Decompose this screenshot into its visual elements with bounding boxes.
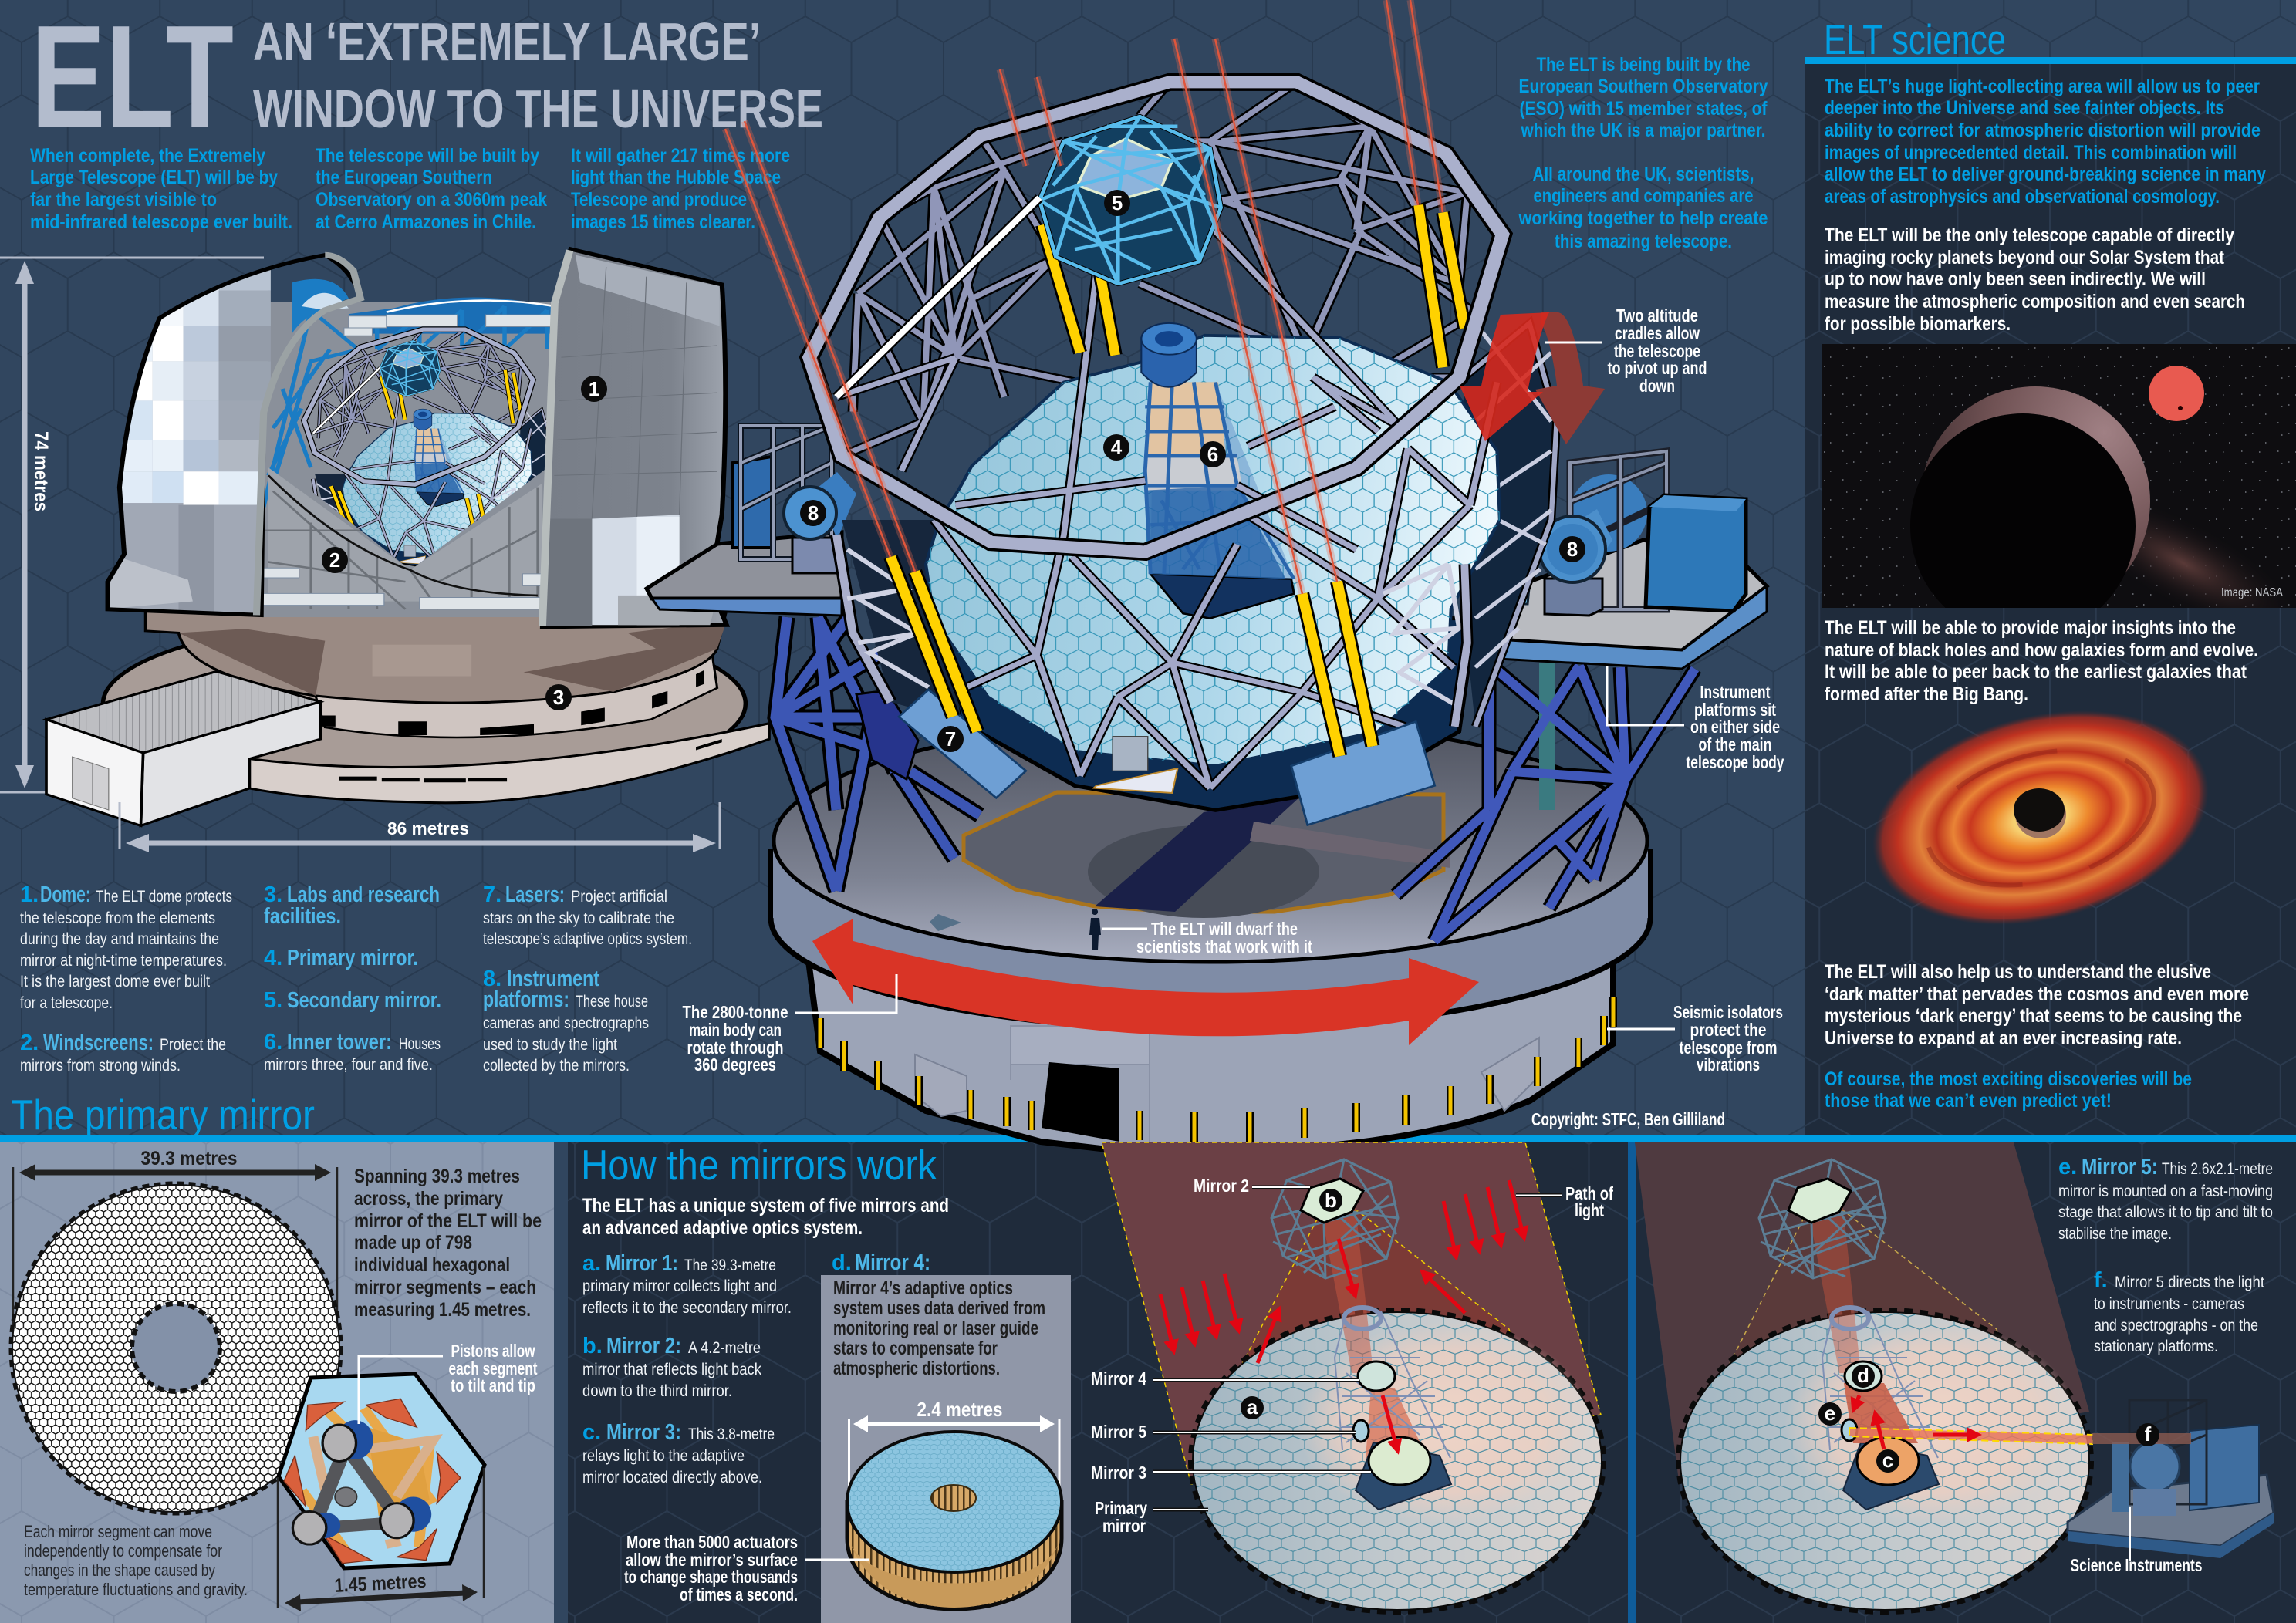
text: mirror 2: down to the third mirror.: [582, 1382, 732, 1400]
text: mirror 2: mirror that reflects light back: [582, 1361, 761, 1378]
text: mirror 5: Mirror 5:: [2082, 1155, 2158, 1179]
text: intro column 3: [571, 145, 790, 233]
panel: mirror 4: system uses data derived from: [833, 1297, 1045, 1319]
text: intro column 2: The telescope will be built by: [316, 145, 539, 167]
text: segment independence note: Each mirror segment can move: [24, 1522, 212, 1541]
text: mirror 3: [582, 1420, 775, 1486]
dimension arrow: 1.45 metres: [278, 1468, 484, 1611]
panel: mirror 4: [821, 1275, 1071, 1623]
text: intro column 2: the European Southern: [316, 167, 492, 188]
legend column 2: mirrors three, four and five.: [264, 1056, 433, 1074]
text: primary mirror description: measuring 1.45 metres.: [354, 1299, 531, 1321]
callout: pistons: [359, 1341, 538, 1424]
legend column 1: The ELT dome protects: [96, 888, 232, 906]
legend column 3: These house: [576, 993, 648, 1011]
text: unpredicted discoveries: [1825, 1068, 2192, 1112]
text: black holes: [1825, 617, 2258, 705]
text: mirror 5: stabilise the image.: [2058, 1225, 2172, 1243]
panel: primary mirror background: [0, 1142, 554, 1623]
panel: mirror 4: Mirror 4’s adaptive optics: [833, 1277, 1013, 1299]
labels: right diagram markers: e: [1825, 1402, 1835, 1425]
legend column 1: 2.: [20, 1031, 39, 1055]
text: intro column 1: [30, 145, 292, 233]
text: primary mirror description: mirror of the ELT will be: [354, 1210, 542, 1232]
labels: mirrors in left diagram: Mirror 2: [1194, 1176, 1249, 1196]
text: intro column 3: Telescope and produce: [571, 189, 747, 211]
dimension arrow: 86 metres: 86 metres: [387, 818, 469, 838]
text: who is building the ELT: European Southern Observatory: [1518, 76, 1768, 97]
legend column 3: 8.: [483, 967, 501, 991]
callout: scientists scale figure: scientists that work with it: [1136, 936, 1312, 957]
legend column 3: collected by the mirrors.: [483, 1057, 630, 1075]
text: mirror 5 directs light: to instruments - cameras: [2094, 1295, 2244, 1313]
text: light-collecting area: areas of astrophysics and observational cosmology.: [1825, 186, 2220, 208]
callout: seismic isolators: protect the: [1690, 1020, 1767, 1040]
text: intro column 3: images 15 times clearer.: [571, 211, 755, 233]
illustration: right instrument platform: [1396, 451, 1767, 941]
title: ELT: ELT: [31, 0, 234, 159]
labels: mirrors in left diagram: Primary: [1095, 1498, 1147, 1518]
text: who is building the ELT: this amazing telescope.: [1555, 231, 1732, 252]
labels: mirrors in left diagram: Mirror 4: [1091, 1368, 1146, 1388]
callout: pistons: Pistons allow: [451, 1341, 535, 1361]
illustration: dome with main telescope inside: [46, 249, 769, 825]
icons: telescope number markers: 8: [1567, 538, 1578, 561]
text: mirror 3: Mirror 3:: [606, 1420, 681, 1445]
strip: panel divider: [554, 1142, 568, 1623]
panel: how the mirrors work background: [0, 1135, 2296, 1623]
arrow: telescope rotation: [812, 919, 1479, 1045]
text: intro column 3: It will gather 217 times more: [571, 145, 790, 167]
text: mirror 5: stage that allows it to tip and tilt to: [2058, 1203, 2273, 1221]
dimension arrow: 39.3 metres: [13, 1148, 337, 1350]
legend column 3: stars on the sky to calibrate the: [483, 909, 674, 927]
callout: altitude cradles: Two altitude: [1616, 305, 1698, 326]
text: mirror 1: The 39.3-metre: [684, 1257, 776, 1274]
panel: ELT science background: [1805, 57, 2296, 1135]
diagram: light path to mirrors 2, 3 and 4: [1102, 1142, 1603, 1611]
text: mirror 5 directs light: [2094, 1268, 2264, 1355]
callout: instrument platforms: on either side: [1690, 717, 1780, 737]
text: rocky planets: up to now have only been seen indirectly. We will: [1825, 268, 2206, 290]
text: mirror 5: e.: [2058, 1155, 2077, 1179]
diagram: light path to mirrors 2, 3 and 4: a: [1247, 1395, 1258, 1419]
callout: 2800-tonne rotation: 360 degrees: [694, 1054, 776, 1075]
dimension arrow: 74 metres: 74 metres: [30, 431, 52, 511]
text: intro column 1: When complete, the Extremely: [30, 145, 265, 167]
callout: scientists scale figure: The ELT will dwarf the: [1151, 919, 1298, 939]
text: mirror 5 directs light: stationary platforms.: [2094, 1338, 2218, 1355]
text: segment independence note: [24, 1522, 248, 1599]
text: rocky planets: for possible biomarkers.: [1825, 313, 2011, 335]
text: segment independence note: changes in the shape caused by: [24, 1561, 215, 1580]
image: exoplanet and red star: Image: NASA: [2221, 586, 2283, 599]
dimension arrow: 1.45 metres: 1.45 metres: [334, 1571, 427, 1597]
callout: actuators: to change shape thousands: [624, 1567, 798, 1587]
dimension arrow: 2.4 metres: 2.4 metres: [917, 1398, 1003, 1421]
text: mirror 5 directs light: f.: [2094, 1268, 2108, 1293]
legend column 3: Project artificial: [571, 888, 667, 906]
labels: mirrors in left diagram: mirror: [1102, 1516, 1146, 1536]
chart: primary mirror hexagonal segments: [12, 1184, 340, 1513]
callout: seismic isolators: telescope from: [1679, 1038, 1778, 1058]
legend column 1: Protect the: [160, 1036, 226, 1054]
text: primary mirror description: [354, 1166, 542, 1321]
text: primary mirror description: individual hexagonal: [354, 1254, 510, 1276]
callout: pistons: each segment: [449, 1358, 538, 1378]
panel: mirror 4: monitoring real or laser guide: [833, 1318, 1038, 1339]
legend column 1: 1.: [20, 882, 39, 907]
text: mirror 1: reflects it to the secondary mirror.: [582, 1299, 792, 1317]
callout: science instruments: Science Instruments: [2071, 1555, 2202, 1575]
diagram: light path to mirrors 2, 3 and 4: b: [1325, 1189, 1337, 1212]
callout: 2800-tonne rotation: main body can: [689, 1020, 782, 1040]
dimension arrow: 86 metres: [120, 802, 720, 852]
heading: the primary mirror: The primary mirror: [11, 1091, 315, 1139]
illustration: science instruments platform: [2068, 1400, 2274, 1558]
text: mirrors introduction: [582, 1195, 949, 1239]
text: mirror 1: Mirror 1:: [606, 1251, 678, 1276]
callout: instrument platforms: of the main: [1699, 734, 1771, 754]
panel: mirror 4: stars to compensate for: [833, 1338, 998, 1359]
legend column 1: the telescope from the elements: [20, 909, 215, 927]
dimension arrow: 39.3 metres: 39.3 metres: [140, 1148, 238, 1169]
callout: instrument platforms: telescope body: [1687, 752, 1784, 772]
text: who is building the ELT: engineers and companies are: [1534, 185, 1754, 207]
legend column 3: Instrument: [507, 967, 599, 991]
text: mirror 3: c.: [582, 1420, 601, 1445]
legend column 1: for a telescope.: [20, 994, 113, 1012]
legend column 1: Windscreens:: [43, 1031, 154, 1055]
callout: altitude cradles: to pivot up and: [1608, 358, 1707, 378]
illustration: left instrument platform: [647, 426, 980, 891]
text: mirror 2: A 4.2-metre: [688, 1339, 761, 1357]
heading: how the mirrors work: How the mirrors work: [581, 1141, 937, 1189]
text: copyright: Copyright: STFC, Ben Gilliland: [1531, 1109, 1725, 1129]
labels: right diagram markers: [1818, 1364, 2159, 1473]
icons: dome number markers: 3: [553, 686, 564, 709]
text: mirror 5 directs light: Mirror 5 directs the light: [2115, 1274, 2264, 1291]
legend column 1: mirrors from strong winds.: [20, 1057, 181, 1075]
legend column 2: 3.: [264, 882, 282, 907]
panel: mirror 4: atmospheric distortions.: [833, 1358, 1000, 1379]
arrow: laser beams: [725, 0, 1443, 594]
text: who is building the ELT: [1518, 54, 1768, 252]
labels: mirrors in left diagram: [1091, 1176, 1613, 1536]
callout: pistons: to tilt and tip: [451, 1375, 535, 1395]
callout: instrument platforms: [1607, 666, 1784, 772]
labels: right diagram markers: d: [1857, 1364, 1869, 1387]
text: mirror 3: mirror located directly above.: [582, 1469, 762, 1486]
image: black hole accretion disc: [1850, 677, 2231, 958]
legend column 2: facilities.: [264, 904, 341, 929]
callout: seismic isolators: vibrations: [1697, 1054, 1760, 1075]
icons: dome number markers: 1: [589, 377, 599, 400]
icons: telescope number markers: 5: [1112, 191, 1123, 214]
text: mirror 5: [2058, 1155, 2273, 1243]
icons: dome number markers: 2: [329, 548, 340, 572]
text: mirror 3: relays light to the adaptive: [582, 1447, 745, 1465]
legend column 1: during the day and maintains the: [20, 930, 219, 948]
callout: scientists scale figure: [1089, 909, 1312, 957]
labels: mirrors in left diagram: Mirror 3: [1091, 1463, 1146, 1483]
image: exoplanet and red star: [1822, 344, 2296, 608]
dimension arrow: 2.4 metres: [849, 1398, 1059, 1489]
legend column 2: Houses: [399, 1035, 441, 1053]
arrow: altitude pivot: [1460, 312, 1605, 444]
heading: mirror 4: d.: [832, 1250, 852, 1275]
title: extremely large window: AN ‘EXTREMELY LARGE’: [253, 12, 761, 72]
legend column 2: Secondary mirror.: [287, 988, 441, 1013]
legend column 3: [483, 882, 692, 1075]
text: mirror 2: b.: [582, 1334, 603, 1358]
callout: altitude cradles: the telescope: [1614, 341, 1700, 361]
text: light-collecting area: [1825, 76, 2266, 208]
text: mirror 1: a.: [582, 1251, 601, 1276]
dimension arrow: 74 metres: [0, 258, 264, 792]
diagram: light path to mirror 5 and instruments: [1635, 1142, 2092, 1611]
legend column 3: 7.: [483, 882, 501, 907]
icons: telescope number markers: 6: [1207, 443, 1218, 466]
icons: telescope number markers: 7: [945, 727, 956, 751]
legend column 3: platforms:: [483, 987, 569, 1012]
legend column 1: Dome:: [40, 882, 91, 907]
illustration: main telescope structure: [809, 82, 1557, 825]
text: rocky planets: [1825, 224, 2245, 335]
text: who is building the ELT: which the UK is a major partner.: [1521, 120, 1765, 141]
title: extremely large window: [253, 12, 823, 139]
text: segment independence note: temperature fluctuations and gravity.: [24, 1580, 248, 1599]
text: intro column 1: mid-infrared telescope ever built.: [30, 211, 292, 233]
text: who is building the ELT: working together to help create: [1518, 208, 1768, 229]
callout: 2800-tonne rotation: rotate through: [687, 1038, 784, 1058]
heading: mirror 4: Mirror 4:: [855, 1250, 930, 1275]
text: intro column 2: Observatory on a 3060m peak: [316, 189, 547, 211]
callout: actuators: [624, 1532, 869, 1604]
labels: right diagram markers: c: [1882, 1449, 1893, 1472]
text: unpredicted discoveries: Of course, the most exciting discoveries will be: [1825, 1068, 2192, 1090]
legend column 2: Primary mirror.: [287, 946, 418, 970]
legend column 3: telescope’s adaptive optics system.: [483, 930, 692, 948]
callout: seismic isolators: [1607, 1002, 1783, 1075]
text: who is building the ELT: (ESO) with 15 member states, of: [1520, 98, 1768, 120]
legend column 2: 6.: [264, 1030, 282, 1054]
icons: telescope number markers: [800, 190, 1585, 752]
text: light-collecting area: deeper into the Universe and see fainter objects. Its: [1825, 97, 2224, 119]
legend column 3: used to study the light: [483, 1036, 617, 1054]
text: unpredicted discoveries: those that we can’t even predict yet!: [1825, 1090, 2112, 1112]
heading: mirror 4: [832, 1250, 930, 1275]
legend column 2: 5.: [264, 988, 282, 1013]
callout: instrument platforms: Instrument: [1700, 682, 1771, 702]
legend column 1: mirror at night-time temperatures.: [20, 952, 227, 970]
title: extremely large window: WINDOW TO THE UNIVERSE: [253, 79, 823, 139]
labels: mirrors in left diagram: Path of: [1565, 1183, 1613, 1203]
text: dark matter: The ELT will also help us to understand the elusive: [1825, 961, 2211, 983]
text: mirror 2: Mirror 2:: [606, 1334, 681, 1358]
legend column 2: Labs and research: [287, 882, 440, 907]
legend column 3: Lasers:: [505, 882, 565, 907]
text: mirrors introduction: an advanced adaptive optics system.: [582, 1217, 863, 1239]
text: primary mirror description: made up of 798: [354, 1232, 472, 1254]
icons: telescope number markers: 8: [808, 501, 819, 525]
legend column 2: Inner tower:: [287, 1030, 392, 1054]
callout: seismic isolators: Seismic isolators: [1673, 1002, 1783, 1022]
text: mirror 1: primary mirror collects light and: [582, 1277, 777, 1295]
text: mirror 1: [582, 1251, 792, 1317]
text: who is building the ELT: All around the UK, scientists,: [1532, 164, 1754, 185]
illustration: mirror 4 disc: [847, 1432, 1062, 1609]
legend column 2: 4.: [264, 946, 282, 970]
text: intro column 1: far the largest visible to: [30, 189, 217, 211]
callout: altitude cradles: [1545, 305, 1707, 396]
text: black holes: formed after the Big Bang.: [1825, 683, 2028, 705]
heading: ELT science: ELT science: [1824, 15, 2006, 63]
legend column 1: It is the largest dome ever built: [20, 973, 210, 990]
text: primary mirror description: across, the primary: [354, 1188, 503, 1210]
text: mirror 2: [582, 1334, 761, 1400]
callout: 2800-tonne rotation: [682, 974, 896, 1075]
callout: actuators: allow the mirror’s surface: [626, 1550, 798, 1570]
callout: actuators: More than 5000 actuators: [626, 1532, 798, 1552]
text: primary mirror description: Spanning 39.3 metres: [354, 1166, 520, 1187]
text: mirror 5 directs light: and spectrographs - on the: [2094, 1317, 2258, 1335]
labels: mirrors in left diagram: light: [1575, 1200, 1604, 1220]
text: intro column 2: at Cerro Armazones in Chile.: [316, 211, 536, 233]
labels: right diagram markers: f: [2145, 1422, 2152, 1446]
legend column 3: cameras and spectrographs: [483, 1014, 649, 1032]
callout: actuators: of times a second.: [680, 1584, 798, 1604]
callout: altitude cradles: down: [1639, 376, 1675, 396]
text: intro column 2: [316, 145, 547, 233]
text: who is building the ELT: The ELT is being built by the: [1537, 54, 1751, 76]
text: rocky planets: imaging rocky planets beyond our Solar System that: [1825, 247, 2225, 268]
text: intro column 3: light than the Hubble Space: [571, 167, 781, 188]
text: dark matter: Universe to expand at an ever increasing rate.: [1825, 1027, 2182, 1049]
text: intro column 1: Large Telescope (ELT) will be by: [30, 167, 278, 188]
callout: altitude cradles: cradles allow: [1615, 323, 1700, 343]
illustration: telescope pedestal: [771, 720, 1650, 1152]
callout: instrument platforms: platforms sit: [1694, 700, 1776, 720]
legend column 2: [264, 882, 441, 1074]
icons: telescope number markers: 4: [1111, 436, 1123, 459]
legend column 1: [20, 882, 232, 1075]
text: dark matter: [1825, 961, 2249, 1049]
text: segment independence note: independently to compensate for: [24, 1541, 222, 1561]
illustration: mirror segment with pistons: [279, 1374, 485, 1568]
text: mirror 3: This 3.8-metre: [688, 1426, 775, 1443]
text: mirrors introduction: The ELT has a unique system of five mirrors and: [582, 1195, 949, 1216]
text: primary mirror description: mirror segments – each: [354, 1277, 536, 1298]
callout: 2800-tonne rotation: The 2800-tonne: [682, 1002, 788, 1022]
text: mirror 5: This 2.6x2.1-metre: [2162, 1160, 2273, 1178]
labels: mirrors in left diagram: Mirror 5: [1091, 1422, 1146, 1442]
icons: dome number markers: [322, 376, 607, 710]
